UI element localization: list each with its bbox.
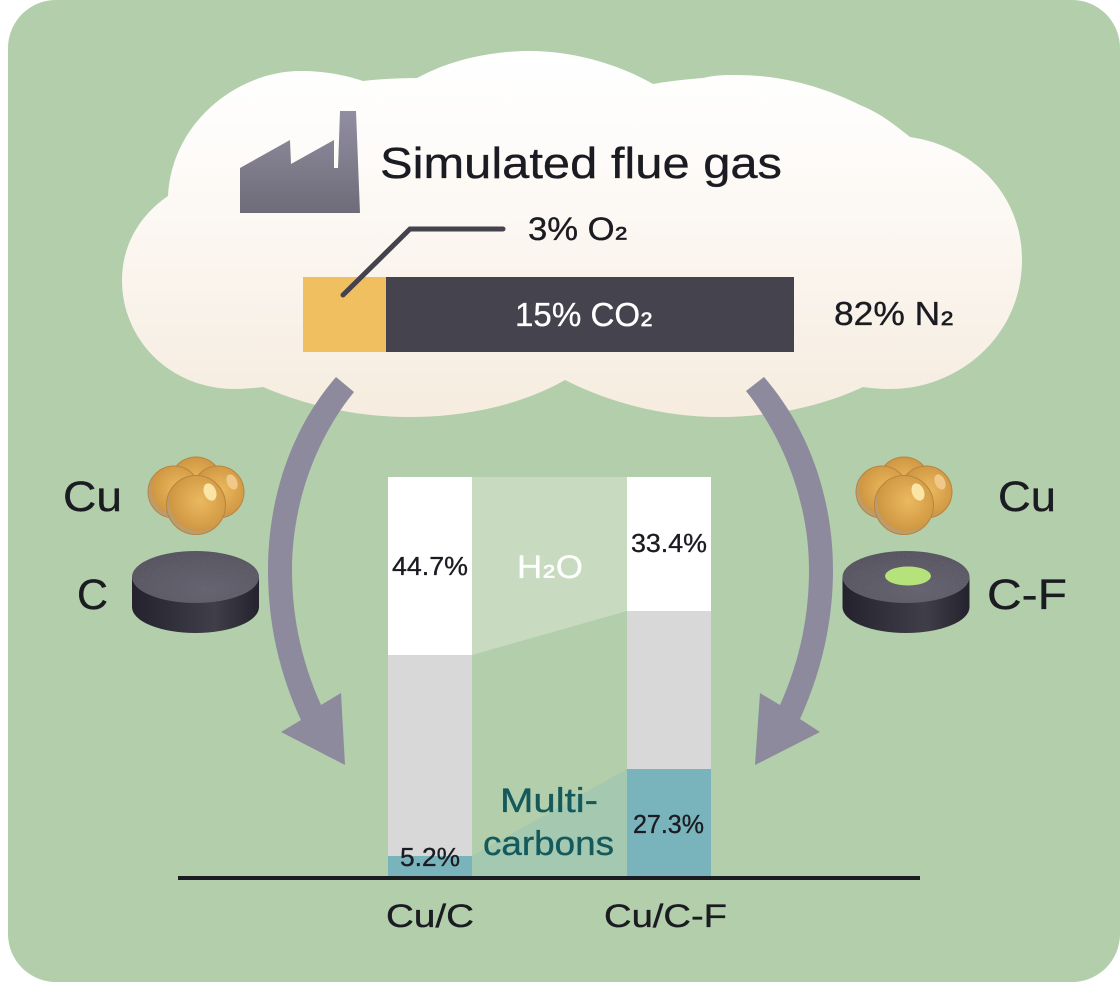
value: multi-carbons Cu/C-F: 27.3% (633, 809, 704, 839)
title: Simulated flue gas (380, 139, 782, 188)
connector: H2O band (472, 477, 627, 655)
cloud (122, 51, 1022, 417)
connector: multi-carbons band (472, 769, 627, 877)
callout line for O2 (343, 229, 503, 295)
icon: fluorinated carbon disk right (842, 551, 970, 633)
icon: factory (240, 111, 360, 213)
label: Cu left: Cu (63, 473, 122, 521)
CO2 label: 15% CO (515, 296, 640, 333)
label: Cu right: Cu (998, 473, 1056, 521)
arrow: right (746, 377, 833, 765)
N2 label: ₂ (940, 292, 954, 329)
N2 label: 82% N (834, 295, 933, 332)
icon: copper cluster left (148, 457, 246, 534)
arrow: left (268, 377, 354, 765)
label: multi-carbons (483, 782, 614, 863)
icon: copper cluster right (856, 457, 954, 534)
gas composition bar (303, 277, 794, 352)
value: H2O Cu/C-F: 33.4% (631, 528, 707, 558)
label: C-F: C-F (987, 571, 1067, 619)
axis label: Cu/C: Cu/C (386, 898, 474, 934)
label: multi-carbons: Multi- (500, 782, 598, 820)
CO2 label: ₂ (640, 293, 653, 330)
O2 label: ₂ (615, 208, 628, 244)
label: H2O: ₂ (542, 546, 556, 582)
label: H2O: H (517, 549, 540, 585)
value: H2O Cu/C: 44.7% (392, 551, 468, 581)
bar chart: Cu/C (388, 477, 472, 877)
O2 label: 3% O (528, 211, 608, 247)
label: C: C (77, 571, 108, 619)
axis label: Cu/C-F: Cu/C-F (604, 898, 727, 934)
chart baseline (178, 876, 920, 880)
label: multi-carbons: carbons (483, 825, 614, 863)
bar chart: Cu/C-F (627, 477, 711, 877)
value: multi-carbons Cu/C: 5.2% (400, 842, 460, 872)
icon: carbon disk left (132, 551, 259, 633)
label: H2O: O (556, 549, 583, 585)
